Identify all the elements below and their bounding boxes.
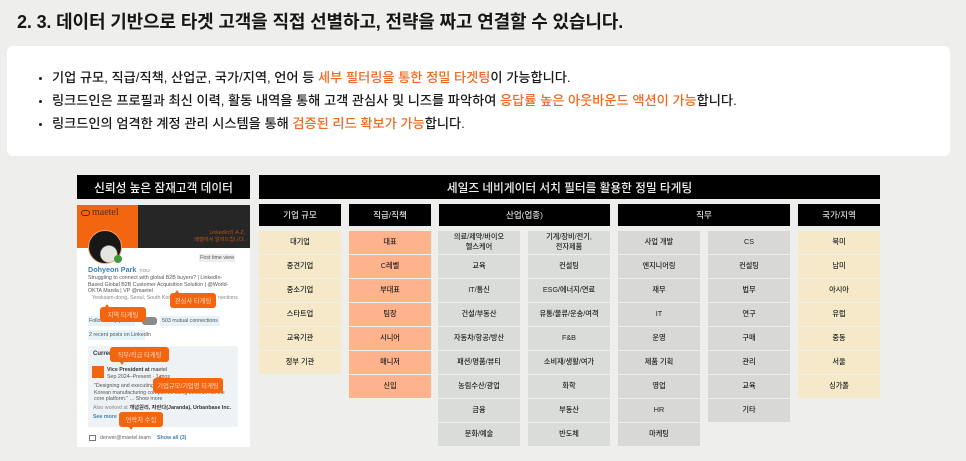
cell: F&B (562, 333, 576, 342)
cell (798, 375, 880, 398)
connections: nections (218, 295, 238, 301)
cell (798, 279, 880, 302)
chip: recent posts: 2 recent posts on LinkedIn (89, 332, 151, 338)
cell (798, 351, 880, 374)
cell (798, 303, 880, 326)
description: "Designing and executing LinkedIn strategies for (94, 383, 207, 389)
cell: 스타트업 (287, 309, 313, 318)
panel: summary bullets (7, 46, 950, 156)
cell: 유통/물류/운송/여객 (540, 309, 598, 318)
cell: 법무 (742, 285, 756, 294)
tag: job and seniority targeting: 직무/직급 타게팅 (117, 352, 162, 359)
tag: company size and industry targeting: 기업규모/기업명 타게팅 (157, 383, 219, 390)
cell (259, 303, 341, 326)
cell (618, 375, 700, 398)
see more: See more (93, 414, 117, 420)
column: country and region (798, 204, 880, 398)
cell (438, 399, 520, 422)
banner: orange brand (77, 205, 138, 248)
cell: 팀장 (383, 309, 397, 318)
cell (438, 351, 520, 374)
chip: followers (88, 316, 135, 326)
cell: 패션/명품/뷰티 (457, 357, 501, 366)
header (439, 204, 610, 226)
cell (708, 303, 790, 326)
cell (438, 423, 520, 446)
profile headline: OKTA Manila | VP @maetel (88, 288, 153, 294)
cell (528, 399, 610, 422)
cell: IT (656, 309, 662, 318)
cell (618, 279, 700, 302)
cell: 신입 (383, 381, 397, 390)
cell: 연구 (742, 309, 756, 318)
tag: interest targeting (170, 293, 216, 308)
header: 국가/지역 (822, 210, 856, 220)
heading: reliable prospect data: 신뢰성 높은 잠재고객 데이터 (94, 182, 233, 194)
column: company size (259, 204, 341, 374)
cell: 교육기관 (287, 333, 313, 342)
cell (438, 327, 520, 350)
cell: 농림수산/광업 (458, 381, 500, 390)
cell: 전자제품 (556, 242, 582, 251)
cell (528, 279, 610, 302)
location: Yeoksam-dong, Seoul, South Korea (92, 295, 176, 301)
description: core platform." ... Show more (94, 396, 162, 402)
cell (349, 279, 431, 302)
panel: LinkedIn profile (77, 205, 250, 447)
header (798, 204, 880, 226)
chip: mutual connections: 503 mutual connections (162, 318, 218, 324)
cell: 구매 (742, 333, 756, 342)
profile headline: Struggling to connect with global B2B buyers? | LinkedIn- (88, 275, 222, 281)
cell: 화학 (562, 381, 576, 390)
cell: 대기업 (290, 237, 310, 246)
cell (349, 303, 431, 326)
cell (618, 255, 700, 278)
show all: Show all (3) (157, 435, 186, 441)
cell: 관리 (742, 357, 756, 366)
cell (798, 255, 880, 278)
header: 산업(업종) (506, 210, 543, 220)
cell (528, 231, 610, 254)
heading: sales navigator filter targeting: 세일즈 네비게이터 서치 필터를 활용한 정밀 타게팅 (447, 182, 692, 194)
cell: CS (744, 237, 754, 246)
cell (708, 255, 790, 278)
tag: region targeting: 지역 타게팅 (108, 312, 138, 319)
title: 2. 3. 데이터 기반으로 타겟 고객을 직접 선별하고, 전략을 짜고 연결할 수 있습니다. (17, 12, 623, 32)
description: Korean manufacturing companies using LinkedIn as the (94, 390, 225, 396)
cell (438, 231, 520, 254)
cell: ESG/에너지/연료 (543, 285, 595, 294)
profile headline: Based Global B2B Customer Acquisition Solution | @World- (88, 282, 228, 288)
cell: 소비재/생활/여가 (544, 357, 594, 366)
cell (349, 375, 431, 398)
header: 직무 (696, 210, 712, 220)
tag: company size and industry targeting (153, 378, 223, 393)
cell: 엔지니어링 (642, 261, 676, 270)
cell: 남미 (832, 261, 846, 270)
tag: job and seniority targeting (110, 347, 169, 362)
period: Sep 2024–Present · 1 mos (107, 374, 170, 380)
cell: 부동산 (559, 405, 579, 414)
cell (349, 351, 431, 374)
card: current position (88, 346, 238, 427)
badge: first time view: First time view (200, 255, 234, 261)
cell (259, 255, 341, 278)
current label: Current (93, 351, 115, 357)
heading: sales navigator filter targeting (259, 175, 880, 199)
cell: 헬스케어 (466, 242, 492, 251)
cell (349, 231, 431, 254)
header: 직급/직책 (373, 210, 407, 220)
cell: HR (654, 405, 664, 414)
cell (438, 303, 520, 326)
position: Vice President at maetel (107, 367, 167, 373)
tag: interest targeting: 관심사 타게팅 (175, 298, 211, 305)
avatar (88, 230, 122, 264)
cell (259, 279, 341, 302)
column: seniority (349, 204, 431, 398)
header (259, 204, 341, 226)
email: denver@maetel.team (100, 435, 151, 441)
cell: 시니어 (380, 333, 400, 342)
header: 기업 규모 (283, 210, 317, 220)
cell (438, 279, 520, 302)
cell: 영업 (652, 381, 666, 390)
cell: 기계/장비/전기, (546, 232, 592, 241)
cell (618, 327, 700, 350)
chip: mutual connections (160, 316, 220, 326)
cell (528, 351, 610, 374)
cell (798, 327, 880, 350)
cell (259, 327, 341, 350)
cell: 기타 (742, 405, 756, 414)
cell: 운영 (652, 333, 666, 342)
cell: 반도체 (559, 429, 579, 438)
cell: 중소기업 (287, 285, 313, 294)
cell: 중동 (832, 333, 846, 342)
cell: 대표 (383, 237, 397, 246)
header (618, 204, 790, 226)
status dot (114, 255, 122, 263)
cell (349, 255, 431, 278)
cell: 자동차/항공/방산 (454, 333, 504, 342)
cell: 의료/제약/바이오 (454, 232, 504, 241)
cell: 중견기업 (287, 261, 313, 270)
header (349, 204, 431, 226)
cell (438, 255, 520, 278)
cell (618, 303, 700, 326)
cell: C레벨 (381, 261, 399, 270)
cell (708, 375, 790, 398)
cell: 북미 (832, 237, 846, 246)
cell (708, 279, 790, 302)
heading: reliable prospect data (77, 175, 250, 199)
bullet: detailed filtering: 기업 규모, 직급/직책, 산업군, 국가/지역, 언어 등 세부 필터링을 통한 정밀 타겟팅이 가능합니다. (52, 70, 571, 85)
cell (618, 423, 700, 446)
banner: dark: LinkedIn의 A-Z, (209, 230, 245, 236)
cell: 금융 (472, 405, 486, 414)
cell (708, 231, 790, 254)
cell: 사업 개발 (645, 237, 673, 246)
cell: 컨설팅 (559, 261, 579, 270)
cell: 마케팅 (649, 429, 669, 438)
cell (528, 327, 610, 350)
cell (798, 231, 880, 254)
column: job function (618, 204, 790, 446)
cell: 제품 기획 (645, 357, 673, 366)
cell (618, 399, 700, 422)
cell (708, 327, 790, 350)
cell: 건설/부동산 (461, 309, 497, 318)
cell (618, 351, 700, 374)
profile name: Dohyeon Park YOU (88, 265, 150, 274)
cell: 서울 (832, 357, 846, 366)
tag: contact collection (119, 412, 163, 427)
cell (259, 351, 341, 374)
cell: 싱가폴 (829, 381, 849, 390)
cell: IT/통신 (468, 285, 490, 294)
cell (349, 327, 431, 350)
cell: 유럽 (832, 309, 846, 318)
company logo (92, 366, 104, 378)
cell: 재무 (652, 285, 666, 294)
description (94, 383, 225, 402)
cell (528, 255, 610, 278)
logo mark (81, 210, 90, 216)
cell: 부대표 (380, 285, 400, 294)
cell: 교육 (742, 381, 756, 390)
bullet: verified leads: 링크드인의 엄격한 계정 관리 시스템을 통해 검증된 리드 확보가 가능합니다. (52, 116, 465, 131)
cell (708, 351, 790, 374)
cell (618, 231, 700, 254)
banner: orange brand: maetel (92, 207, 119, 218)
tag: contact collection: 연락처 수집 (126, 417, 156, 424)
bullet: outbound action: 링크드인은 프로필과 최신 이력, 활동 내역을 통해 고객 관심사 및 니즈를 파악하여 응답률 높은 아웃바운드 액션이 가능합니다. (52, 93, 737, 108)
email icon (89, 435, 96, 441)
cell: 아시아 (829, 285, 849, 294)
banner: dark: 매텔에서 알려드립니다. (194, 237, 245, 243)
tag: region targeting (100, 307, 146, 322)
cell (708, 399, 790, 422)
banner: dark (138, 205, 250, 248)
mutual avatars (142, 317, 157, 325)
cell: 교육 (472, 261, 486, 270)
profile headline (88, 275, 228, 294)
cell (528, 423, 610, 446)
cell: 매니저 (380, 357, 400, 366)
chip: recent posts (88, 330, 145, 340)
cell (528, 375, 610, 398)
cell: 컨설팅 (739, 261, 759, 270)
cell (259, 231, 341, 254)
cell (438, 375, 520, 398)
cell: 문화/예술 (465, 429, 493, 438)
cell (528, 303, 610, 326)
cell: 정부 기관 (286, 357, 314, 366)
column: industry (438, 204, 610, 446)
also worked at: Also worked at 개념원리, 자란다(Jaranda), Urbanbase Inc. (93, 405, 231, 411)
